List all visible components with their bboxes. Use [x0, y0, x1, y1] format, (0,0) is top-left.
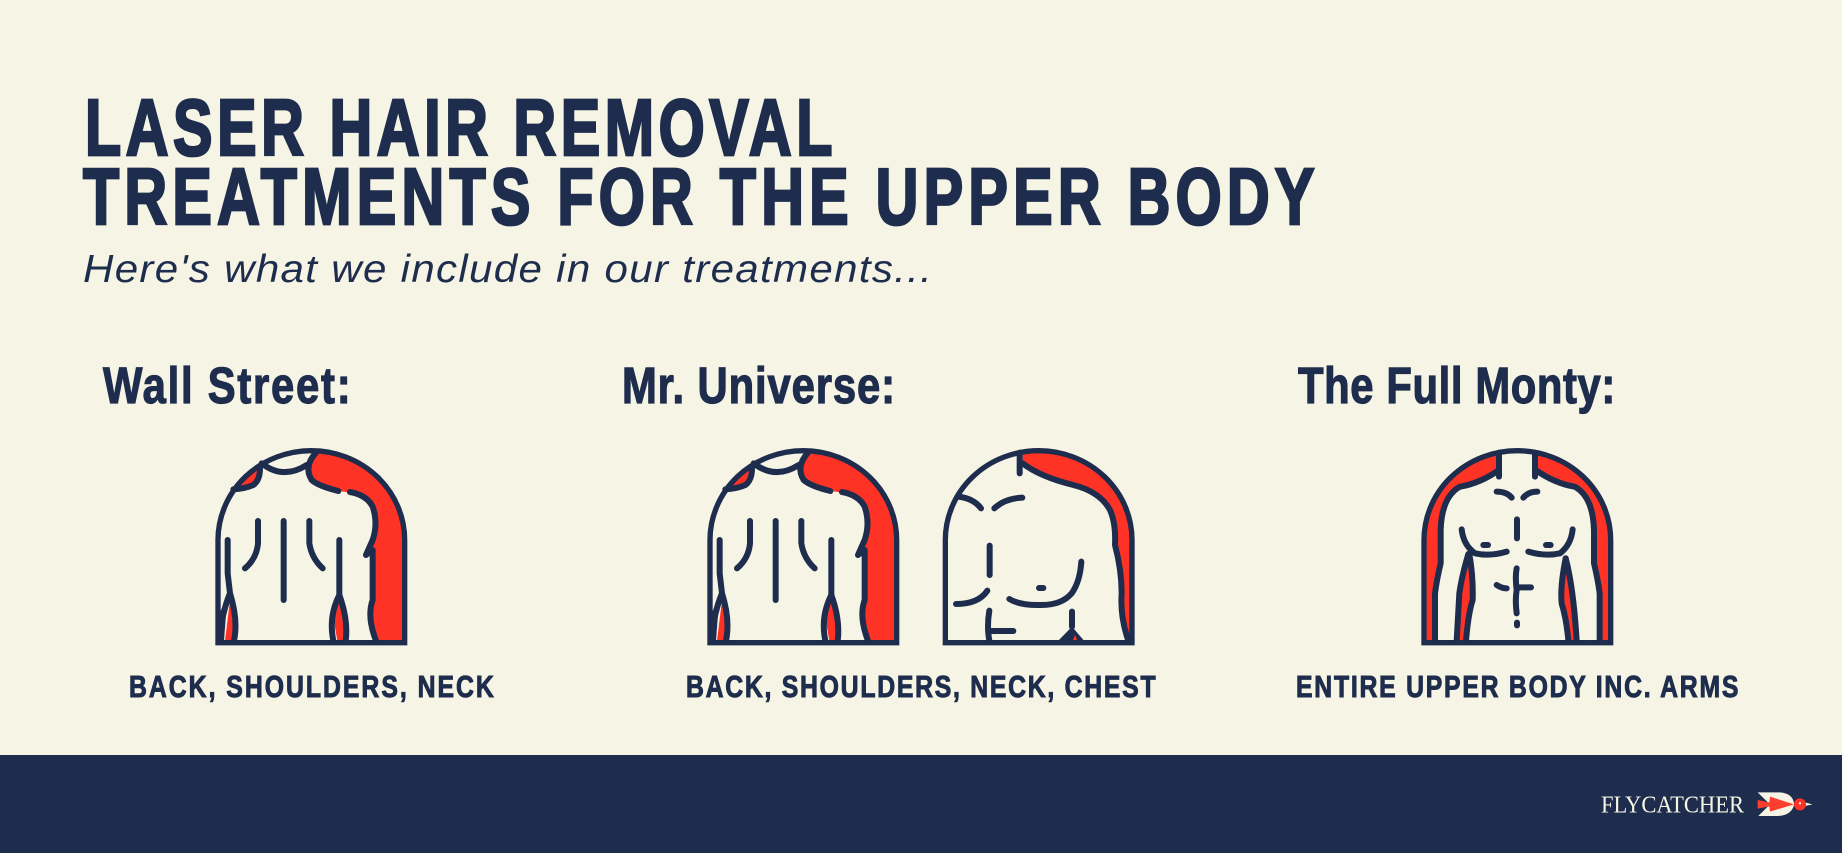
caption: Mr. Universe areas: BACK, SHOULDERS, NECK, CHEST — [686, 669, 1156, 704]
caption: Wall Street areas: BACK, SHOULDERS, NECK — [129, 669, 494, 704]
panel: Mr. Universe — [622, 357, 1156, 704]
icon: chest side view — [945, 451, 1132, 643]
logo: Flycatcher — [1601, 792, 1813, 818]
title — [83, 82, 1314, 241]
title: TREATMENTS FOR THE UPPER BODY — [83, 151, 1314, 241]
subtitle: Here's what we include in our treatments... — [83, 246, 932, 291]
icon: back with shoulders highlighted — [218, 451, 405, 643]
caption: Full Monty areas: ENTIRE UPPER BODY INC. ARMS — [1296, 669, 1738, 704]
panel: Wall Street — [103, 357, 494, 704]
panel: The Full Monty — [1296, 357, 1738, 704]
heading: Wall Street: Wall Street: — [103, 357, 351, 414]
logo bird — [1758, 792, 1813, 816]
icon: front torso with arms — [1424, 451, 1611, 643]
footer bar — [0, 755, 1842, 853]
title: LASER HAIR REMOVAL — [85, 82, 832, 172]
heading: Mr. Universe: Mr. Universe: — [622, 357, 895, 414]
logo wordmark: FLYCATCHER — [1601, 792, 1744, 818]
icon: back — [710, 451, 897, 643]
heading: The Full Monty: The Full Monty: — [1298, 357, 1615, 414]
